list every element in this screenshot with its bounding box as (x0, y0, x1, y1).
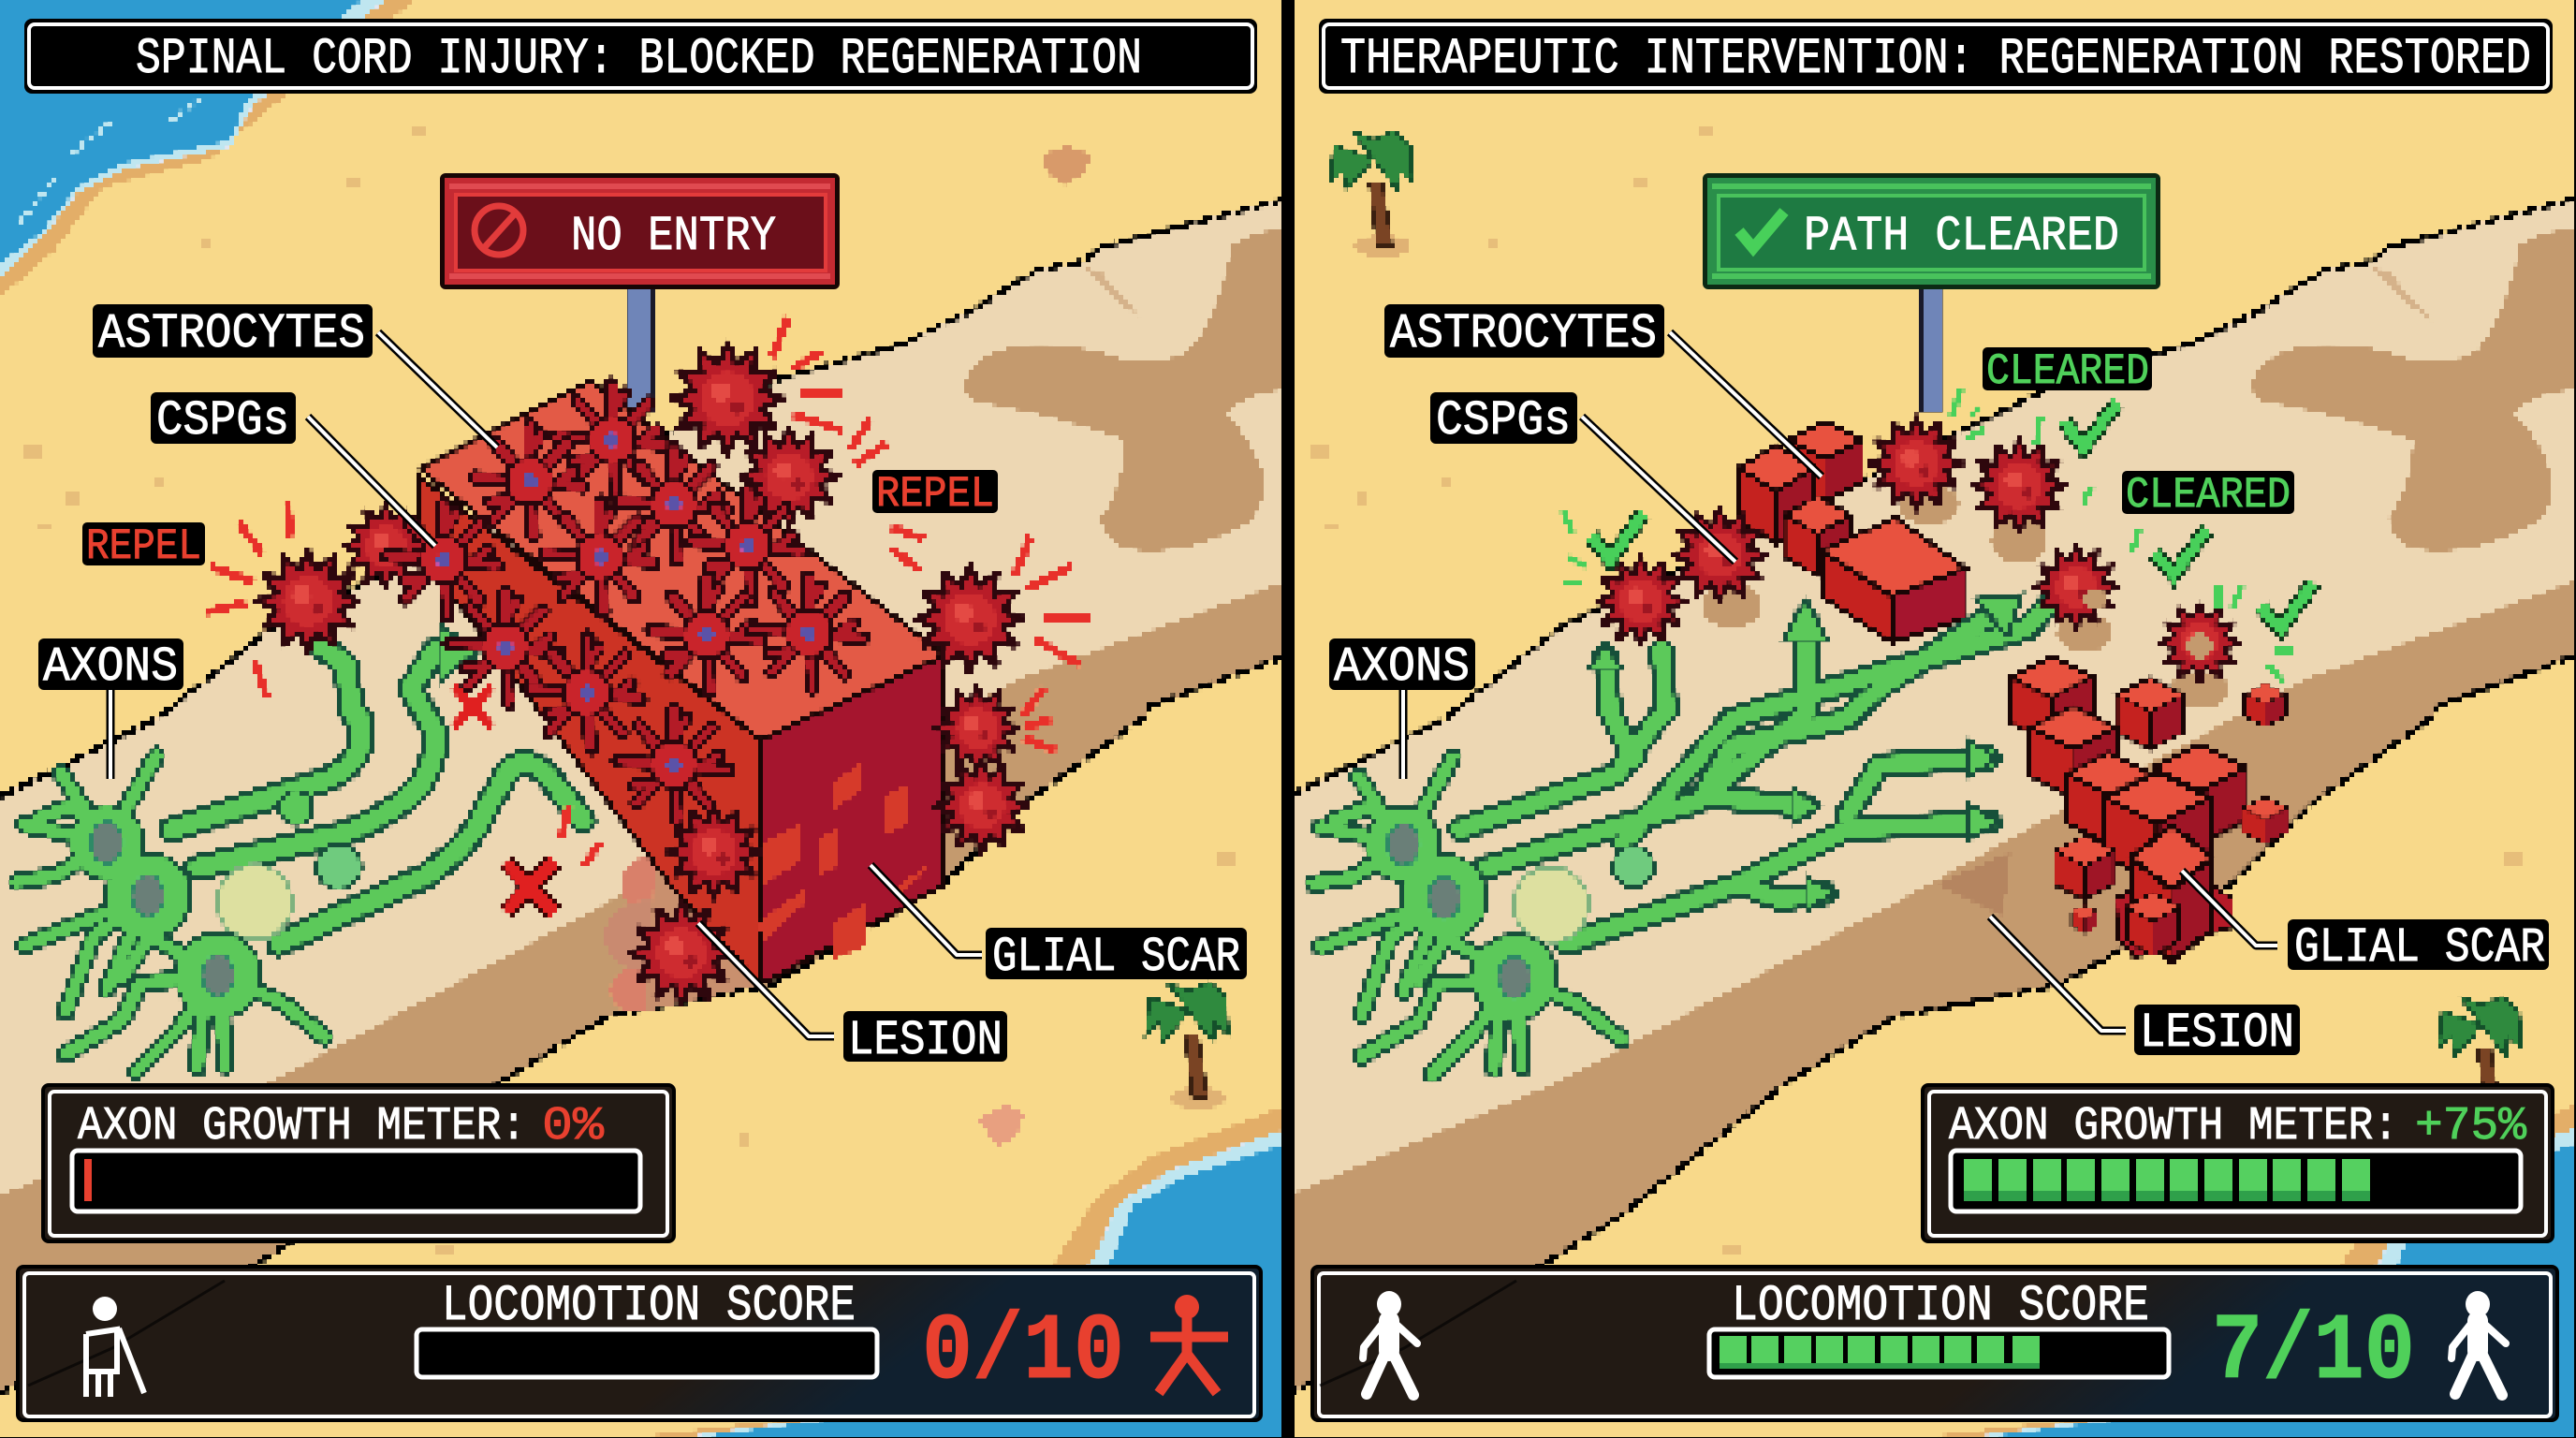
leader lines (110, 332, 982, 1036)
label: lesion: LESION (848, 1013, 1003, 1068)
locomotion score panel: 7/10: LOCOMOTION SCORE (1732, 1278, 2149, 1335)
label: repel right: REPEL (876, 470, 994, 519)
label: glial scar: GLIAL SCAR (992, 930, 1240, 985)
icon: red stick figure (1150, 1295, 1228, 1393)
sign: path cleared: PATH CLEARED (1804, 209, 2119, 264)
lesion area (604, 857, 754, 1011)
axon growth meter: +75%: AXON GROWTH METER: (1949, 1100, 2398, 1153)
palm tree upper (1330, 130, 1412, 257)
blocked marker small (454, 686, 491, 727)
panel: spinal cord injury (0, 0, 1288, 1438)
label: astrocytes: ASTROCYTES (1390, 306, 1657, 361)
axon growth meter: 0%: AXON GROWTH METER: (78, 1100, 526, 1153)
locomotion score panel: 0/10 (18, 1267, 1261, 1420)
locomotion score panel: 0/10: LOCOMOTION SCORE (442, 1278, 856, 1335)
ocean: top-left corner (0, 0, 417, 298)
checkmarks (1591, 403, 2314, 629)
icon: seated figure with cane (86, 1297, 144, 1397)
label: axons: AXONS (1334, 639, 1470, 695)
title left: SPINAL CORD INJURY: BLOCKED REGENERATION (136, 31, 1142, 88)
icon: check (1739, 212, 1784, 248)
glial scar fragments lower (2011, 656, 2288, 961)
debris shadows (1702, 484, 2230, 709)
locomotion score panel: 7/10: 7/10 (2212, 1300, 2415, 1406)
icon: walking figure left (1363, 1291, 1417, 1395)
glial scar block (419, 381, 944, 985)
axon growth meter: +75% (1923, 1085, 2553, 1241)
icon: walking figure right (2452, 1291, 2506, 1395)
sign: no entry (440, 173, 840, 289)
title left (24, 19, 1257, 94)
label: CSPGs: CSPGs (156, 393, 289, 448)
leader lines (1403, 332, 2277, 1031)
axon growth meter: +75%: +75% (2415, 1100, 2527, 1153)
pixelated scene: right (1288, 0, 2576, 1438)
beach and spinal cord background (0, 0, 1288, 1438)
label: CSPGs: CSPGs (1436, 393, 1571, 448)
astrocytes cluster (256, 343, 1029, 1005)
icon: no entry (475, 206, 523, 255)
sign: path cleared (1703, 173, 2160, 289)
damaged astrocytes (1597, 417, 2239, 682)
label: lesion: LESION (2140, 1005, 2294, 1061)
label: cleared middle: CLEARED (2126, 471, 2291, 520)
palm tree (1146, 982, 1228, 1109)
clearing sparks (1563, 389, 2295, 683)
sign post (628, 286, 653, 413)
divider between panels (1281, 0, 1295, 1438)
beach and spinal cord background (1288, 0, 2576, 1438)
panel: therapeutic intervention (1288, 0, 2576, 1438)
pixelated scene: left (0, 0, 1288, 1438)
locomotion score panel: 7/10 (1312, 1267, 2557, 1420)
sign post (1922, 286, 1943, 413)
repel bursts (205, 316, 1089, 866)
lesion wedge (1937, 852, 2011, 917)
axon growth meter: 0%: 0% (542, 1100, 605, 1153)
axons: stalled growth (17, 625, 583, 1072)
label: repel left: REPEL (86, 522, 201, 571)
label: axons: AXONS (43, 639, 178, 695)
shell lower (978, 1105, 1025, 1147)
sign: no entry: NO ENTRY (571, 209, 776, 264)
axons: regrowing with arrowheads (1313, 594, 2052, 1074)
palm tree lower (2438, 996, 2521, 1123)
label: cleared upper: CLEARED (1986, 347, 2149, 396)
axon growth meter: 0% (43, 1085, 674, 1241)
locomotion score panel: 0/10: 0/10 (922, 1300, 1124, 1406)
label: astrocytes: ASTROCYTES (98, 306, 365, 361)
blocked marker large (505, 861, 554, 913)
glial scar fragments upper (1739, 421, 1966, 642)
shell upper (1044, 145, 1090, 185)
